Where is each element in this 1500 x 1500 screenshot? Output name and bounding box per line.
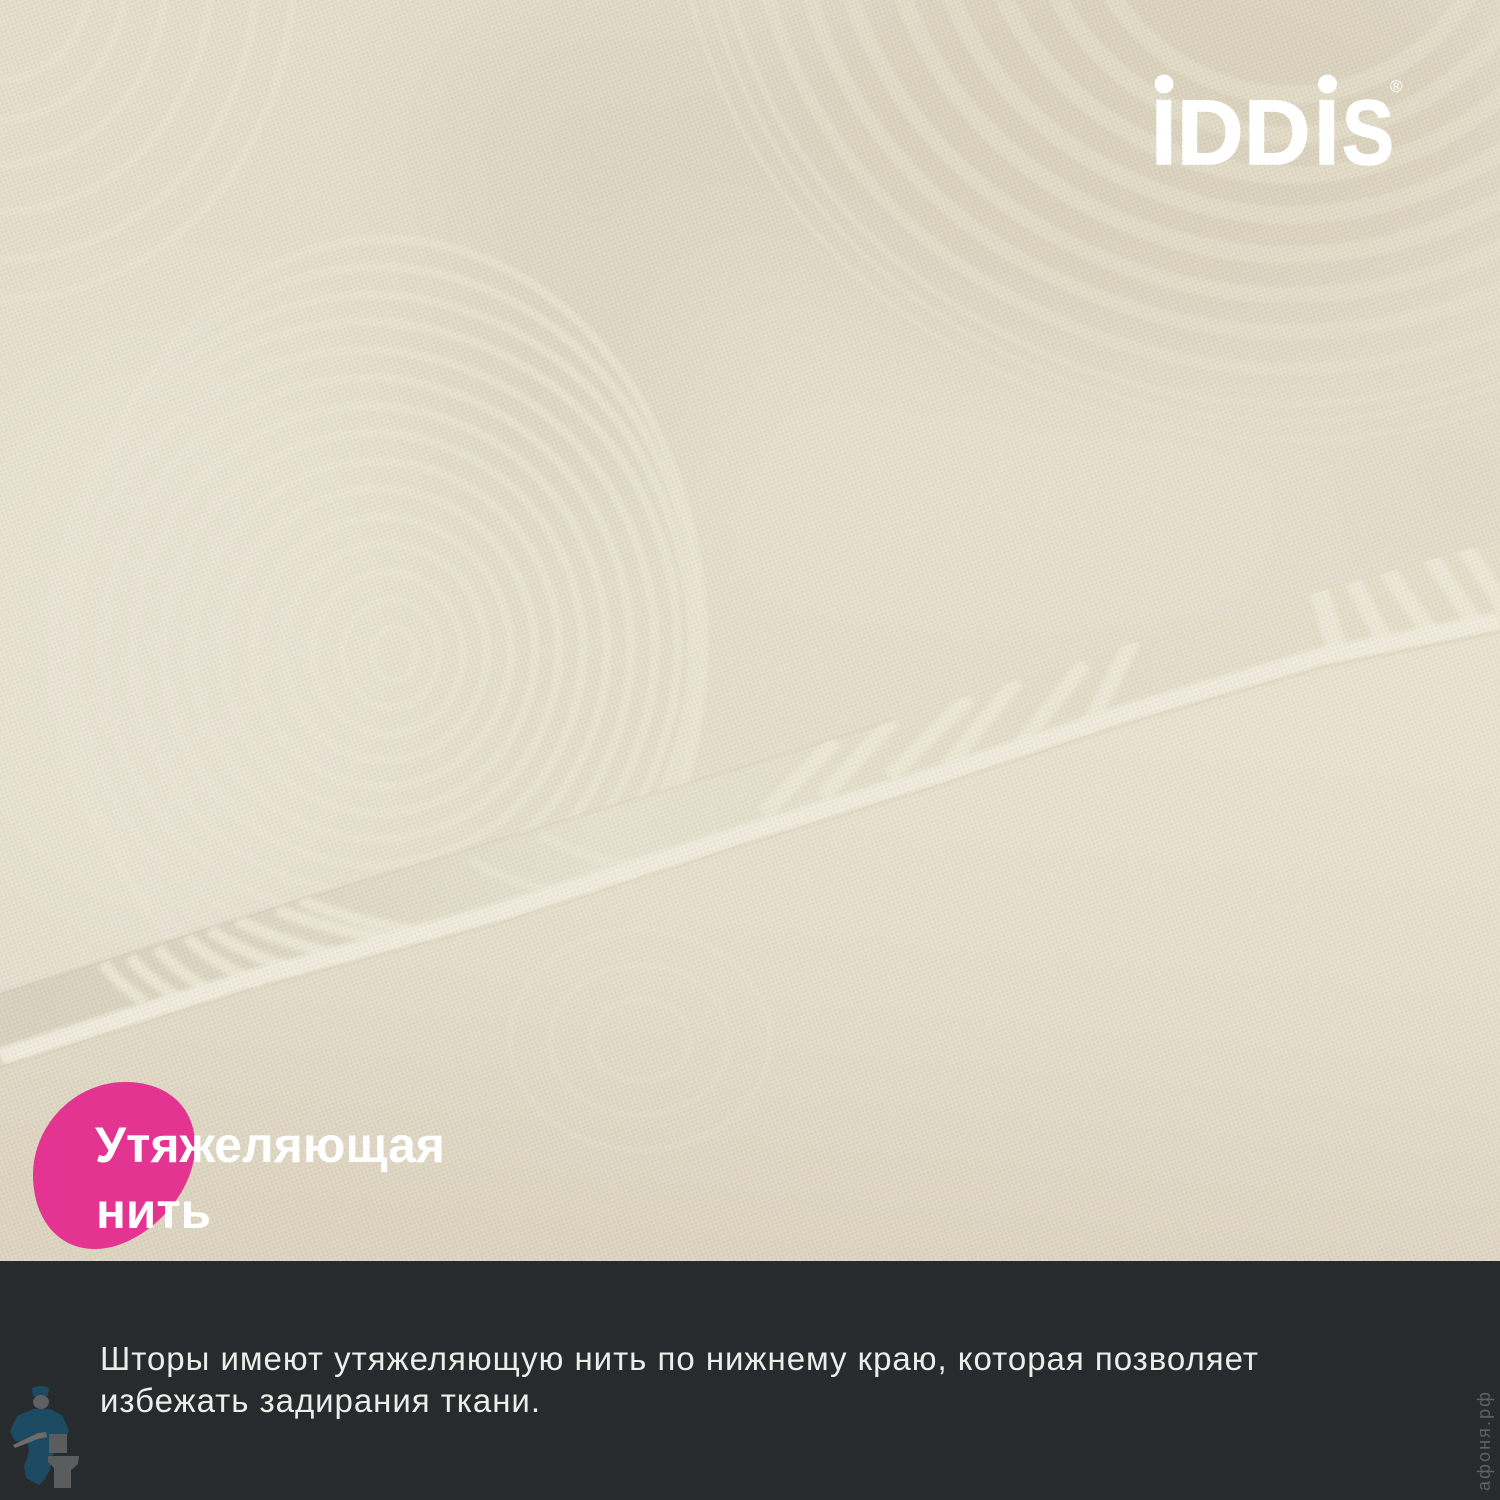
logo dots	[1154, 74, 1337, 94]
description text	[100, 1340, 1258, 1419]
description text: избежать задирания ткани.	[100, 1382, 540, 1419]
heading	[95, 1117, 445, 1239]
description text: Шторы имеют утяжеляющую нить по нижнему краю, которая позволяет	[100, 1340, 1258, 1377]
logo wordmark: IDDI	[1151, 82, 1340, 184]
large arcs upper right	[883, 12, 1388, 228]
hem stripes	[103, 545, 1500, 1002]
lower fabric panel	[0, 1036, 1500, 1261]
arcs upper left	[0, 0, 292, 300]
pink blob	[33, 1082, 195, 1249]
watermark: афоня.рф	[1474, 1392, 1494, 1491]
registered mark: ®	[1390, 77, 1403, 96]
hem fold band	[0, 548, 1500, 1068]
hem seam	[0, 621, 1500, 1057]
dark footer band	[0, 1261, 1500, 1500]
fabric weave texture	[1, 420, 1500, 1062]
logo: IDDIS	[1151, 74, 1403, 184]
icon: plumber with toilet	[10, 1386, 79, 1488]
logo wordmark: S	[1342, 82, 1394, 184]
upper fabric circular pattern	[456, 0, 1440, 782]
lower fabric faint circles	[510, 930, 770, 1150]
heading: нить	[96, 1183, 211, 1239]
fabric light and shadow	[510, 0, 1500, 340]
heading: Утяжеляющая	[95, 1117, 445, 1173]
central spiral	[478, 256, 703, 737]
